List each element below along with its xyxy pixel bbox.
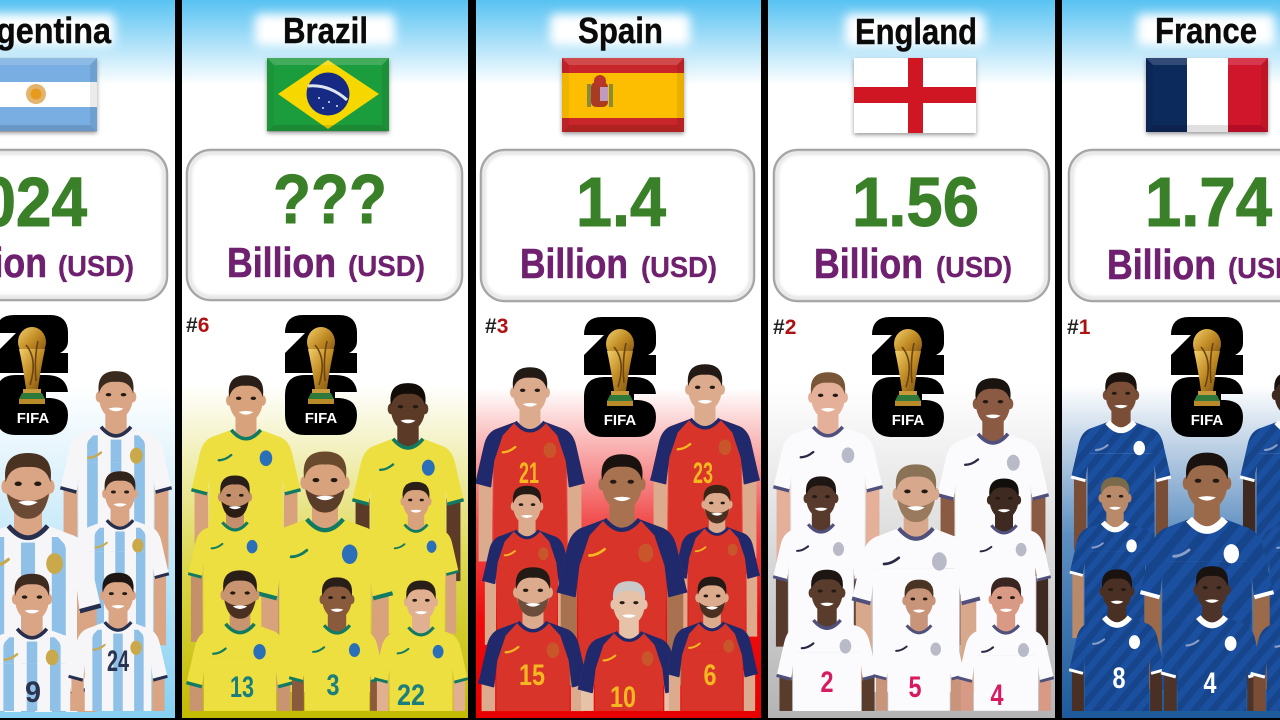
shirt numbers: 2 bbox=[820, 666, 834, 699]
panel: England bbox=[768, 0, 1055, 718]
shirt numbers: 10 bbox=[610, 681, 636, 714]
players: Argentina squad bbox=[0, 371, 172, 712]
shirt numbers: 6 bbox=[704, 659, 716, 692]
country title: England bbox=[855, 11, 977, 52]
FIFA 2026 logo bbox=[1171, 317, 1243, 437]
country title: France bbox=[1155, 10, 1257, 51]
shirt numbers: 4 bbox=[990, 679, 1004, 712]
players: England squad bbox=[773, 372, 1054, 712]
panel background bbox=[768, 0, 1055, 718]
shirt numbers: 9 bbox=[25, 676, 41, 709]
shirt numbers: 22 bbox=[397, 679, 425, 712]
panel: France bbox=[1062, 0, 1280, 718]
value card: 1.56 bbox=[852, 163, 979, 241]
value card: 1.74 bbox=[1145, 163, 1272, 241]
flag: France bbox=[1146, 58, 1268, 132]
shirt numbers: 8 bbox=[1112, 662, 1126, 695]
shirt numbers bbox=[1112, 662, 1217, 700]
panel: Argentina bbox=[0, 0, 175, 718]
value card bbox=[187, 150, 462, 300]
value card: Billion bbox=[1107, 241, 1216, 288]
FIFA 2026 logo bbox=[285, 315, 357, 435]
FIFA 2026 logo: FIFA bbox=[604, 412, 636, 429]
panel: Spain bbox=[475, 0, 761, 718]
value card: (USD) bbox=[58, 251, 134, 283]
FIFA 2026 logo bbox=[872, 317, 944, 437]
value card: Billion bbox=[227, 239, 336, 286]
flag: Brazil bbox=[267, 58, 389, 132]
FIFA 2026 logo bbox=[584, 317, 656, 437]
rank: #1 bbox=[1067, 316, 1091, 339]
shirt numbers: 3 bbox=[326, 669, 340, 702]
FIFA 2026 logo bbox=[0, 315, 68, 435]
value card bbox=[0, 150, 167, 300]
panel: Brazil bbox=[182, 0, 468, 718]
flag: Spain bbox=[562, 58, 684, 132]
FIFA 2026 logo: FIFA bbox=[1191, 412, 1223, 429]
players: France squad bbox=[1069, 372, 1280, 711]
back-row shirt numbers: 23 bbox=[693, 457, 713, 490]
value card: (USD) bbox=[641, 252, 717, 284]
players: Spain squad bbox=[475, 364, 760, 714]
FIFA 2026 logo: FIFA bbox=[17, 410, 49, 427]
value card: Billion bbox=[814, 240, 923, 287]
flag: England bbox=[854, 58, 976, 133]
value card: 1.4 bbox=[576, 163, 666, 241]
shirt numbers bbox=[520, 664, 716, 708]
FIFA 2026 logo: FIFA bbox=[892, 412, 924, 429]
FIFA 2026 logo: FIFA bbox=[305, 410, 337, 427]
panel background bbox=[182, 0, 468, 718]
value card: ??? bbox=[273, 160, 387, 238]
shirt numbers: 13 bbox=[230, 671, 254, 704]
rank: #6 bbox=[186, 314, 209, 337]
back-row shirt numbers bbox=[520, 462, 712, 484]
panel background bbox=[1062, 0, 1280, 718]
value card: (USD) bbox=[936, 252, 1012, 284]
value card bbox=[481, 150, 754, 301]
shirt numbers bbox=[26, 650, 129, 702]
shirt numbers: 24 bbox=[107, 645, 129, 678]
panel background bbox=[476, 0, 761, 718]
shirt numbers bbox=[821, 671, 1004, 705]
country title: Spain bbox=[578, 10, 663, 51]
rank: #3 bbox=[485, 315, 508, 338]
country title: Brazil bbox=[283, 10, 368, 51]
shirt numbers: 15 bbox=[519, 659, 545, 692]
value card: (USD) bbox=[348, 251, 425, 283]
value card: Billion bbox=[520, 240, 628, 287]
value card bbox=[774, 150, 1049, 301]
flag: Argentina bbox=[0, 58, 97, 132]
shirt numbers: 4 bbox=[1204, 667, 1217, 700]
value card bbox=[1069, 150, 1280, 301]
back-row shirt numbers: 21 bbox=[519, 457, 539, 490]
shirt numbers bbox=[231, 674, 424, 705]
panel background bbox=[0, 0, 175, 718]
players: Brazil squad bbox=[186, 375, 468, 712]
rank: #2 bbox=[773, 316, 796, 339]
shirt numbers: 5 bbox=[908, 671, 922, 704]
